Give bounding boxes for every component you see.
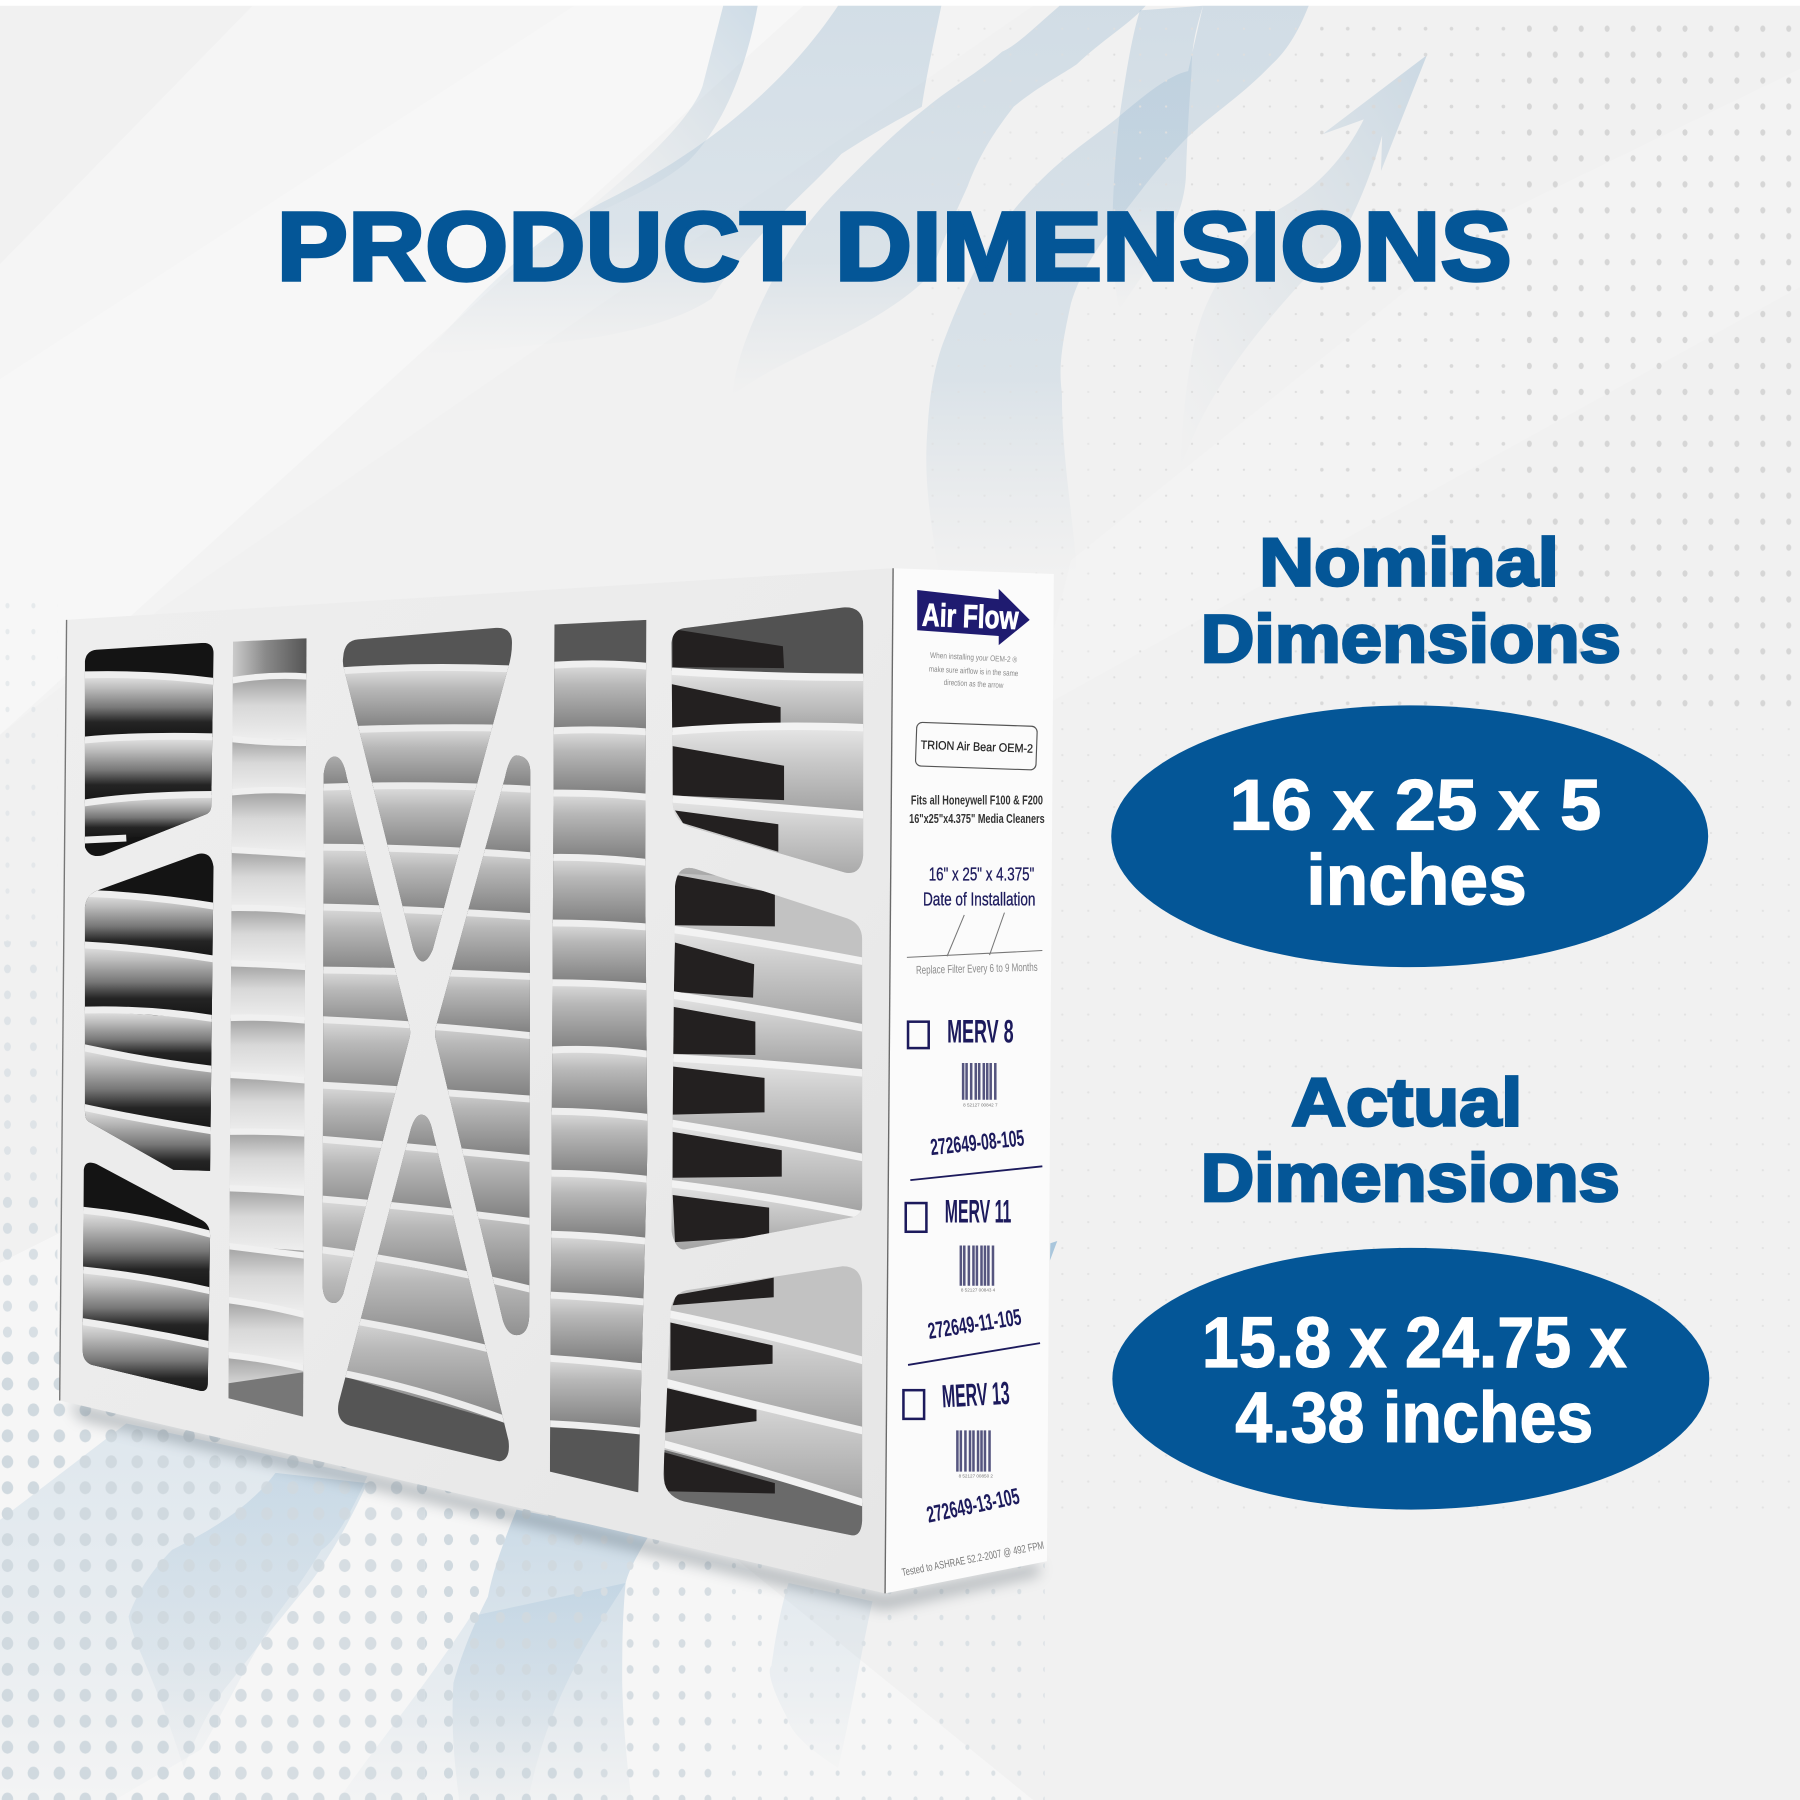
dark wedges — [664, 629, 784, 1493]
airflow note — [929, 651, 1019, 690]
arrow wisp — [1180, 55, 1427, 471]
actual dimensions heading — [1201, 1066, 1620, 1216]
floor shadow — [69, 1403, 1039, 1609]
fit note: Fits all Honeywell F100 & F200 — [911, 794, 1043, 808]
centre X pleat panels — [316, 620, 540, 1469]
replace note: Replace Filter Every 6 to 9 Months — [916, 962, 1038, 977]
wisp fragment beside panel — [1050, 1241, 1057, 1260]
nominal dimensions heading — [1201, 525, 1621, 677]
filter front frame — [60, 568, 893, 1593]
airflow wisps bottom — [0, 1423, 872, 1800]
MERV 8 block — [908, 1013, 1026, 1160]
airflow note: direction as the arrow — [944, 678, 1004, 690]
left pleat column — [80, 637, 218, 1406]
MERV 13 block — [903, 1375, 1022, 1528]
size and installation date: Date of Installation — [923, 889, 1035, 910]
MERV 13 block: MERV 13 — [941, 1375, 1010, 1414]
fourth pleat column — [550, 620, 648, 1492]
MERV 11 block: 272649-11-105 — [926, 1304, 1023, 1344]
air flow arrow label: Air Flow — [922, 597, 1020, 636]
model box: TRION Air Bear OEM-2 — [920, 738, 1034, 756]
size and installation date — [923, 863, 1035, 910]
MERV 8 block: MERV 8 — [947, 1013, 1014, 1049]
second pleat column — [228, 638, 306, 1416]
actual dimensions pill: 4.38 inches — [1235, 1379, 1593, 1458]
airflow wisps top — [425, 6, 1427, 574]
airflow note: make sure airflow is in the same — [929, 665, 1019, 678]
MERV 11 block — [906, 1194, 1023, 1344]
nominal dimensions pill: inches — [1306, 842, 1527, 921]
actual dimensions pill: 15.8 x 24.75 x — [1202, 1304, 1627, 1383]
actual dimensions heading: Actual — [1291, 1066, 1522, 1141]
filter side panel — [885, 568, 1054, 1593]
model box — [915, 722, 1037, 770]
test standard note: Tested to ASHRAE 52.2-2007 @ 492 FPM — [901, 1540, 1045, 1579]
MERV 11 block: 8 52127 00843 4 — [961, 1287, 996, 1292]
MERV 13 block: 8 52127 00850 2 — [959, 1473, 993, 1478]
fit note: 16"x25"x4.375" Media Cleaners — [909, 812, 1045, 826]
right pleat column with dark wedges — [660, 603, 867, 1544]
product: air filter — [60, 568, 1054, 1609]
actual dimensions heading: Dimensions — [1201, 1141, 1620, 1216]
nominal dimensions heading: Nominal — [1259, 525, 1559, 600]
nominal dimensions pill — [1111, 705, 1708, 967]
MERV 8 block: 8 52127 00842 7 — [963, 1103, 998, 1108]
MERV 13 block: 272649-13-105 — [924, 1483, 1022, 1528]
fit note — [909, 794, 1045, 826]
nominal dimensions pill: 16 x 25 x 5 — [1229, 766, 1601, 845]
title: PRODUCT DIMENSIONS — [277, 192, 1512, 301]
air flow arrow label — [917, 589, 1030, 645]
MERV 11 block: MERV 11 — [945, 1194, 1011, 1230]
actual dimensions pill — [1112, 1248, 1709, 1510]
nominal dimensions heading: Dimensions — [1201, 602, 1621, 677]
airflow note: When installing your OEM-2 ® — [930, 651, 1017, 664]
size and installation date: 16" x 25" x 4.375" — [929, 863, 1034, 884]
MERV 8 block: 272649-08-105 — [929, 1124, 1026, 1160]
